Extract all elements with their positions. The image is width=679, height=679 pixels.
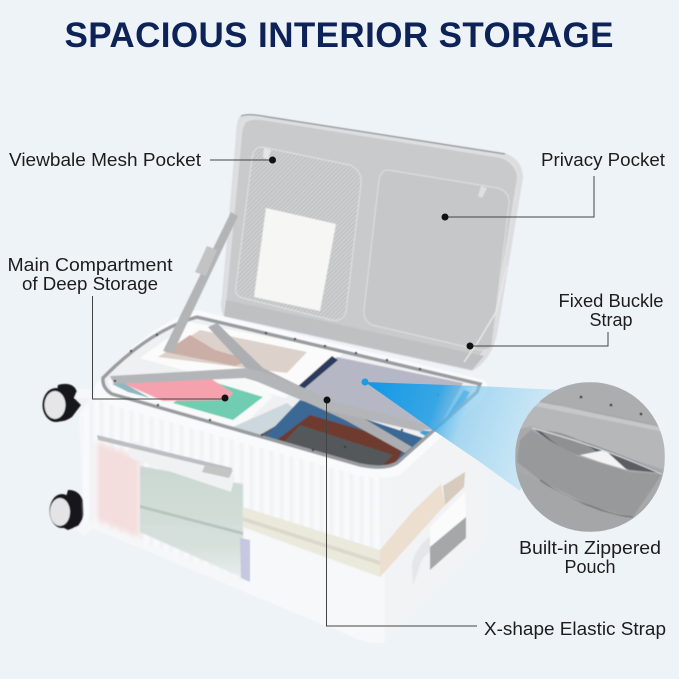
mesh pocket [236,147,361,320]
label: Main Compartment of Deep Storage: Main Compartment [8,255,172,275]
item inside pouch [580,450,627,470]
interior: clear pouch [234,403,293,435]
zipper pull [478,186,487,198]
interior: blue case [262,400,423,465]
gathered lining [515,405,665,470]
zoom circle: zippered pouch [515,382,665,532]
interior: dark book [270,415,407,467]
packed clothes: green [140,466,243,578]
upper band [515,382,665,426]
top handle [97,435,235,492]
title: SPACIOUS INTERIOR STORAGE [64,16,614,55]
label: Main Compartment of Deep Storage [8,255,228,402]
label: X-shape Elastic Strap: X-shape Elastic Strap [484,619,666,639]
label: Built-in Zippered Pouch [519,538,661,577]
packed clothes: pink [97,442,140,538]
lid lower band [224,300,484,370]
right side panel [384,388,488,642]
label: Viewbale Mesh Pocket: Viewbale Mesh Pocket [9,150,201,170]
wheel: lower left [50,490,94,536]
back wheel [182,311,202,327]
beam origin dot [362,378,368,386]
X-shape strap upper left [163,212,238,353]
label: Fixed Buckle Strap [466,291,664,350]
interior: cyan tablet edge [420,390,470,437]
suitcase photo [42,114,523,643]
rim rivets [114,332,439,451]
label: Viewbale Mesh Pocket [9,150,276,170]
lid of the suitcase [221,114,523,371]
label: Built-in Zippered Pouch: Built-in Zippered [519,538,661,558]
label: Fixed Buckle Strap: Strap [589,310,633,330]
pocket opening [533,428,662,473]
suitcase body [79,388,488,643]
pouch front [517,430,662,517]
interior: magazine [109,380,272,426]
packed clothes: beige stack [380,484,445,577]
label: Fixed Buckle Strap: Fixed Buckle [558,291,664,311]
privacy pocket [364,170,509,350]
callout beam [365,382,560,491]
interior: photo print [140,322,345,398]
side handle [412,536,430,585]
zipper pull [263,148,271,160]
white card in mesh pocket [254,208,336,311]
compartment gasket [103,317,480,467]
open compartment interior [105,319,477,466]
body ribs [82,395,385,580]
interior: grey tablet [300,357,463,430]
label: Main Compartment of Deep Storage: of Deep Storage [22,274,158,294]
rim of the shell [95,310,488,478]
fixed buckle strap [464,266,507,362]
X-shape strap horizontal [110,368,425,432]
wheel: upper left [42,384,90,422]
pouch zipper [532,428,662,474]
label: Privacy Pocket: Privacy Pocket [541,150,665,170]
label: Built-in Zippered Pouch: Pouch [564,557,616,577]
X-shape strap lower [208,323,412,453]
packed clothes: cream [243,507,380,577]
label: Privacy Pocket [442,150,665,220]
label: X-shape Elastic Strap [324,396,666,639]
lower front band [245,530,384,643]
